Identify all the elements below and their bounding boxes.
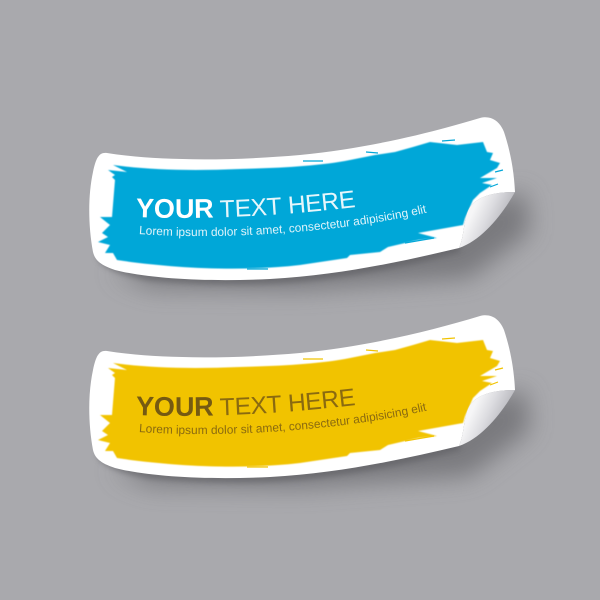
blue brush paint xyxy=(98,142,500,269)
blue sticker subtext: Lorem ipsum dolor sit amet, consectetur adipisicing elit xyxy=(140,205,427,238)
panel: yellow sticker xyxy=(89,315,539,499)
panel: blue sticker xyxy=(89,117,539,301)
white sticker base xyxy=(89,117,515,280)
blue sticker heading: YOUR TEXT HERE xyxy=(136,190,355,218)
sticker shadow xyxy=(96,192,530,290)
curled corner xyxy=(459,192,515,248)
yellow sticker subtext: Lorem ipsum dolor sit amet, consectetur adipisicing elit xyxy=(140,403,427,436)
curled corner xyxy=(459,390,515,446)
sticker shadow xyxy=(96,390,530,488)
white sticker base xyxy=(89,315,515,478)
yellow sticker heading: YOUR TEXT HERE xyxy=(136,388,355,416)
yellow brush streaks xyxy=(247,338,503,467)
yellow brush paint xyxy=(98,340,500,467)
blue brush streaks xyxy=(247,140,503,269)
